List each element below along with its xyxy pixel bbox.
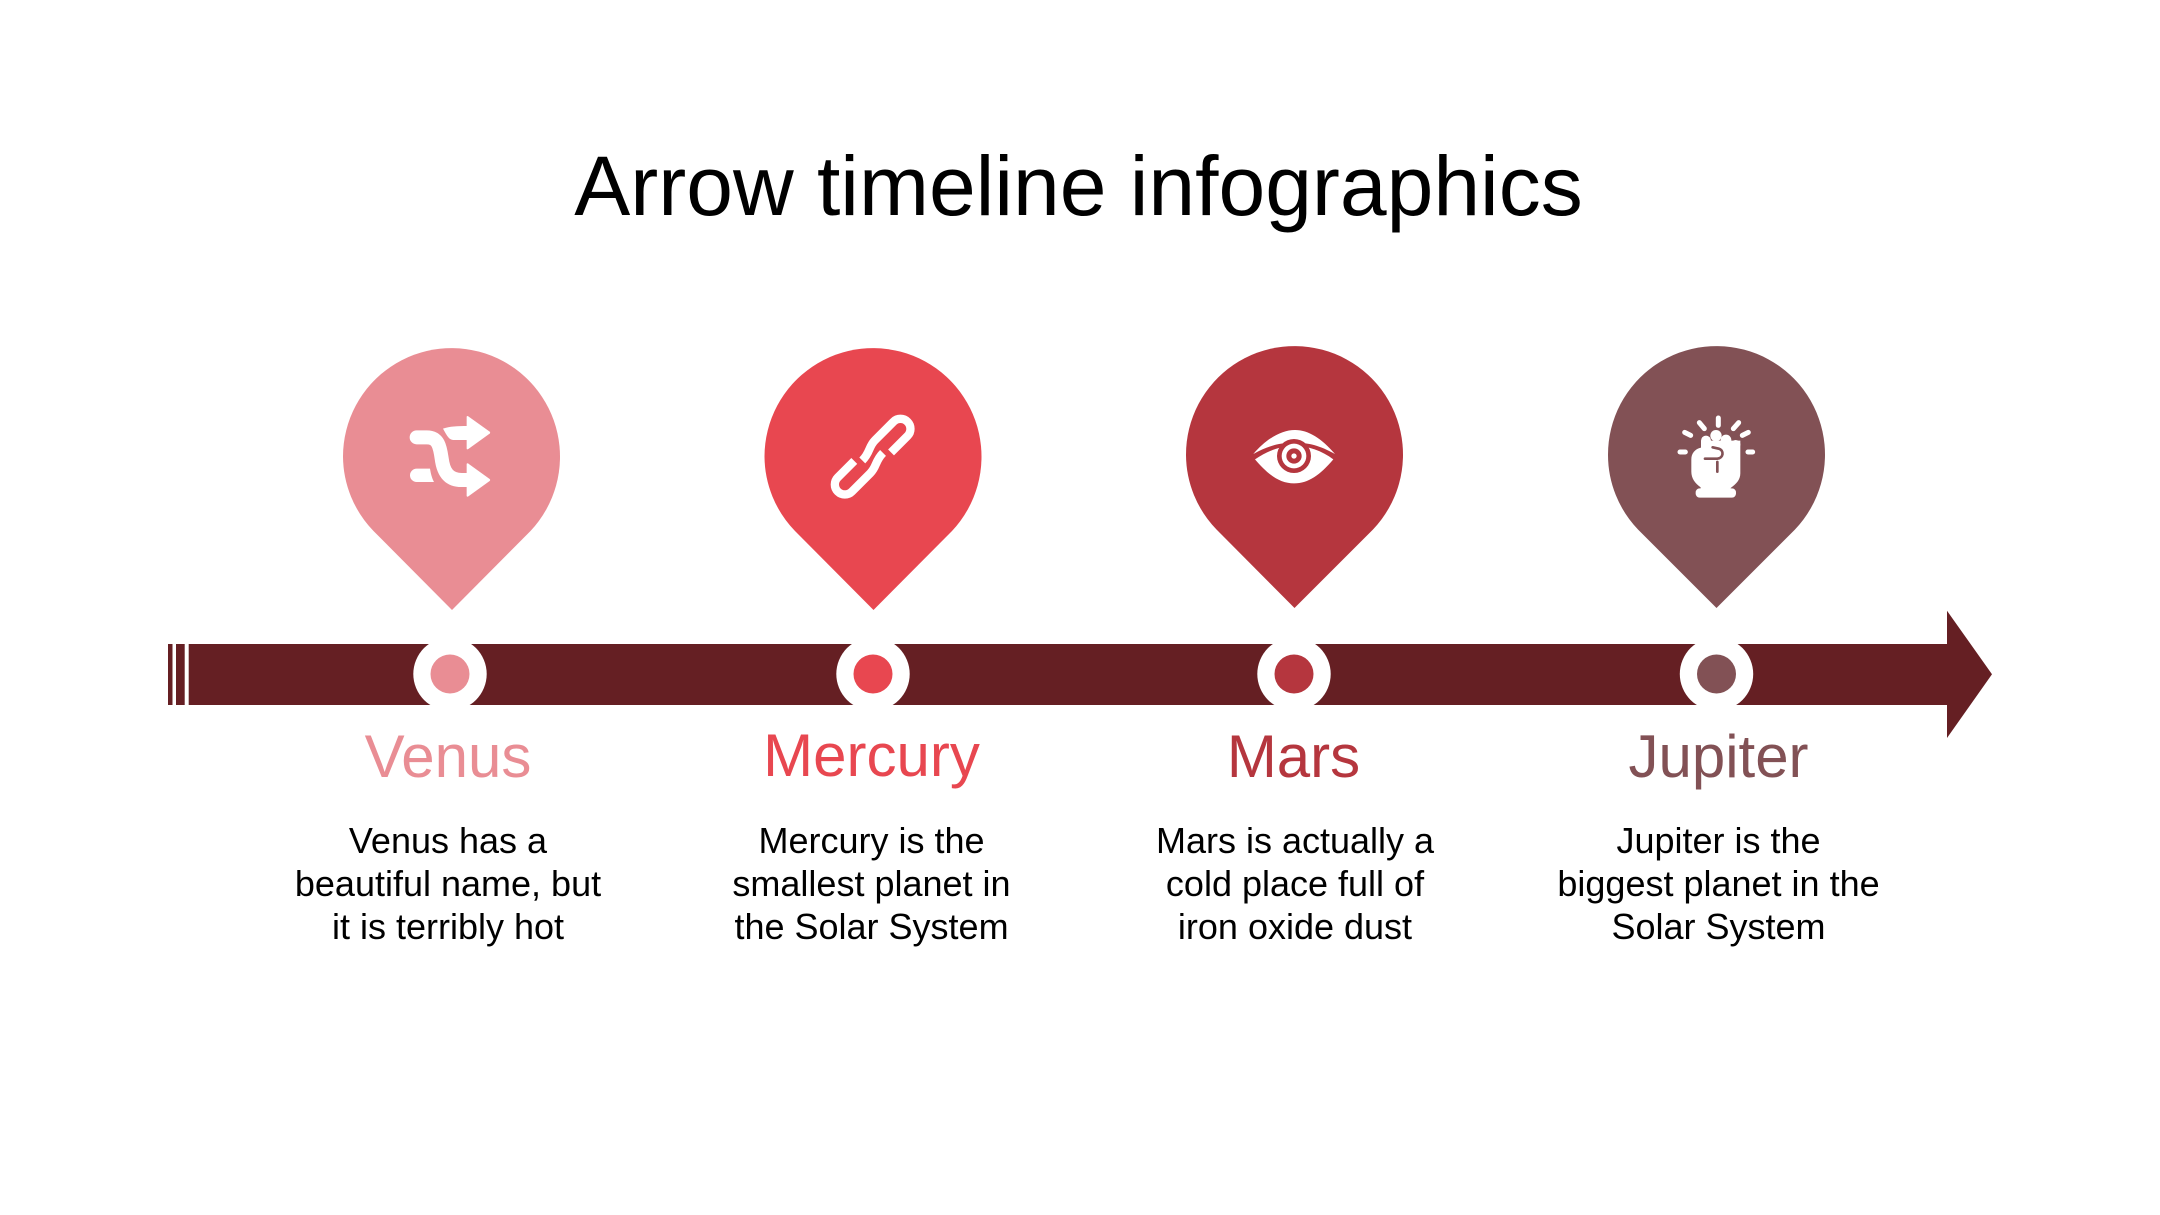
icon: chain link	[831, 415, 915, 499]
heading: Mars: Mars	[1227, 723, 1360, 790]
text: Venus description: beautiful name, but	[295, 863, 601, 904]
pin: Mars	[1186, 346, 1403, 608]
icon: fist	[1680, 418, 1753, 498]
text: Mercury description: smallest planet in	[732, 863, 1011, 904]
text: Jupiter description: Solar System	[1611, 906, 1826, 947]
marker: Venus	[413, 637, 487, 711]
pin: Venus	[343, 348, 560, 610]
text: Mercury description: Mercury is the	[758, 820, 985, 861]
text: Mercury description	[732, 820, 1011, 947]
text: Jupiter description: Jupiter is the	[1616, 820, 1821, 861]
text: Mars description: cold place full of	[1166, 863, 1425, 904]
timeline arrow	[168, 611, 1992, 738]
heading: Venus: Venus	[365, 723, 531, 790]
text: Venus description: Venus has a	[349, 820, 548, 861]
marker: Mercury	[836, 637, 910, 711]
text: Mercury description: the Solar System	[734, 906, 1009, 947]
text: Venus description	[295, 820, 601, 947]
text: Venus description: it is terribly hot	[332, 906, 564, 947]
marker: Jupiter	[1680, 637, 1753, 711]
text: Jupiter description	[1557, 820, 1880, 947]
marker: Mars	[1257, 637, 1331, 711]
text: Mars description: Mars is actually a	[1156, 820, 1435, 861]
heading: Jupiter: Jupiter	[1628, 723, 1809, 790]
text: Mars description: iron oxide dust	[1178, 906, 1412, 947]
pin: Mercury	[764, 348, 981, 610]
text: Jupiter description: biggest planet in the	[1557, 863, 1880, 904]
pin: Jupiter	[1608, 346, 1825, 608]
heading: Mercury: Mercury	[763, 722, 980, 789]
icon: shuffle	[410, 416, 490, 497]
icon: eye	[1253, 430, 1335, 483]
title: Arrow timeline infographics	[574, 139, 1583, 233]
text: Mars description	[1156, 820, 1435, 947]
